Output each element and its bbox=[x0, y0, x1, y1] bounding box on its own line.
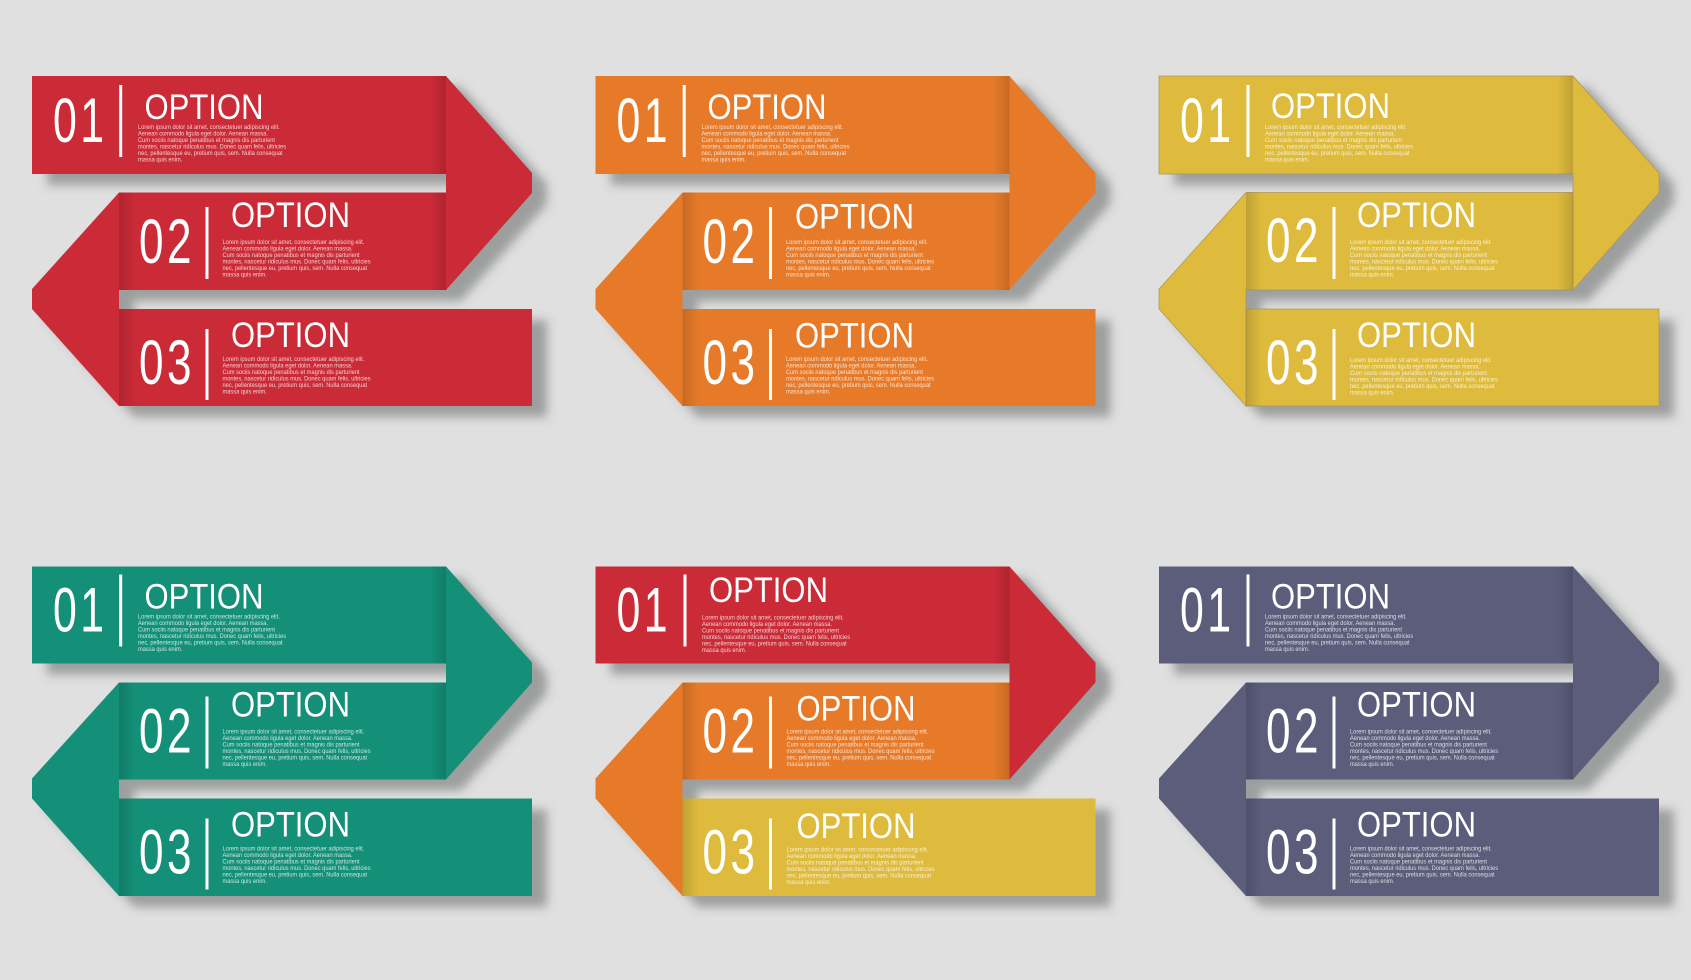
body text: nec, pellentesque eu, pretium quis, sem. Nulla consequat bbox=[138, 151, 283, 157]
number 01: 01 bbox=[53, 575, 107, 646]
band 03 bbox=[702, 807, 935, 890]
number 03: 03 bbox=[139, 817, 195, 887]
divider bbox=[1246, 574, 1250, 646]
divider bbox=[206, 696, 208, 768]
body text: Lorem ipsum dolor sit amet, consectetuer adipiscing elit. bbox=[786, 729, 929, 736]
body text: massa quis enim. bbox=[138, 647, 183, 653]
panel: orange ribbon bbox=[596, 76, 1110, 417]
body text: Aenean commodo ligula eget dolor. Aenean massa. bbox=[786, 363, 916, 370]
body text: nec, pellentesque eu, pretium quis, sem. Nulla consequat bbox=[702, 151, 846, 157]
body text: Cum sociis natoque penatibus et magnis dis parturient bbox=[1350, 742, 1487, 749]
ribbon shadow bbox=[610, 87, 1110, 417]
body text: massa quis enim. bbox=[786, 762, 831, 768]
number 02: 02 bbox=[1266, 696, 1322, 766]
body text: massa quis enim. bbox=[786, 389, 831, 396]
body text: Cum sociis natoque penatibus et magnis dis parturient bbox=[222, 253, 360, 259]
body text: massa quis enim. bbox=[1265, 157, 1310, 164]
body text: Aenean commodo ligula eget dolor. Aenean massa. bbox=[222, 246, 353, 253]
divider bbox=[1246, 85, 1250, 157]
heading: OPTION bbox=[231, 196, 350, 235]
body text: Aenean commodo ligula eget dolor. Aenean massa. bbox=[222, 853, 353, 859]
body text: Lorem ipsum dolor sit amet, consectetuer adipiscing elit. bbox=[786, 240, 928, 246]
body text: massa quis enim. bbox=[786, 272, 831, 279]
heading: OPTION bbox=[231, 806, 350, 844]
body text: Lorem ipsum dolor sit amet, consectetuer adipiscing elit. bbox=[1265, 614, 1407, 621]
body text: Cum sociis natoque penatibus et magnis dis parturient bbox=[786, 370, 923, 376]
body text: nec, pellentesque eu, pretium quis, sem. Nulla consequat bbox=[786, 755, 931, 762]
band 02 bbox=[139, 196, 371, 279]
divider bbox=[119, 85, 122, 157]
ribbon shadow bbox=[610, 578, 1110, 907]
band 02 bbox=[1266, 686, 1498, 768]
band 02 bbox=[702, 198, 934, 279]
body text: montes, nascetur ridiculus mus. Donec quam felis, ultricies bbox=[1350, 259, 1498, 266]
body text: nec, pellentesque eu, pretium quis, sem. Nulla consequat bbox=[222, 755, 367, 762]
panel: multicolour ribbon bbox=[596, 566, 1110, 907]
body text: Aenean commodo ligula eget dolor. Aenean massa. bbox=[1350, 364, 1480, 371]
body text: Lorem ipsum dolor sit amet, consectetuer adipiscing elit. bbox=[1350, 240, 1492, 246]
number 03: 03 bbox=[1266, 817, 1322, 887]
body text: Lorem ipsum dolor sit amet, consectetuer adipiscing elit. bbox=[1265, 125, 1407, 131]
body text: Cum sociis natoque penatibus et magnis dis parturient bbox=[786, 860, 924, 867]
heading: OPTION bbox=[1357, 806, 1476, 844]
divider bbox=[769, 329, 772, 400]
band 01 bbox=[616, 85, 850, 164]
divider bbox=[1332, 329, 1336, 400]
number 02: 02 bbox=[139, 206, 195, 277]
body text: nec, pellentesque eu, pretium quis, sem. Nulla consequat bbox=[1350, 384, 1495, 390]
body text: nec, pellentesque eu, pretium quis, sem. Nulla consequat bbox=[1350, 872, 1495, 879]
divider bbox=[769, 696, 772, 768]
body text: massa quis enim. bbox=[222, 762, 267, 768]
number 01: 01 bbox=[1180, 575, 1234, 646]
body text: Lorem ipsum dolor sit amet, consectetuer adipiscing elit. bbox=[1350, 846, 1492, 853]
body text: massa quis enim. bbox=[1350, 762, 1395, 768]
number 03: 03 bbox=[702, 327, 759, 398]
body text: massa quis enim. bbox=[222, 389, 267, 396]
body text: Cum sociis natoque penatibus et magnis dis parturient bbox=[1350, 371, 1487, 377]
ribbon shape bbox=[1159, 566, 1659, 896]
band 02 bbox=[139, 686, 371, 768]
body text: montes, nascetur ridiculus mus. Donec quam felis, ultricies bbox=[222, 376, 371, 383]
body text: Lorem ipsum dolor sit amet, consectetuer adipiscing elit. bbox=[1350, 729, 1492, 736]
divider bbox=[206, 207, 208, 279]
number 02: 02 bbox=[139, 696, 195, 766]
heading: OPTION bbox=[708, 88, 826, 127]
body text: Aenean commodo ligula eget dolor. Aenean massa. bbox=[786, 736, 917, 742]
body text: Cum sociis natoque penatibus et magnis dis parturient bbox=[222, 742, 360, 749]
heading: OPTION bbox=[1357, 686, 1476, 724]
number 02: 02 bbox=[702, 696, 759, 766]
heading: OPTION bbox=[1357, 196, 1476, 235]
panel: green ribbon bbox=[32, 566, 547, 907]
body text: nec, pellentesque eu, pretium quis, sem. Nulla consequat bbox=[1350, 755, 1495, 762]
heading: OPTION bbox=[796, 690, 916, 728]
number 03: 03 bbox=[1266, 327, 1322, 398]
body text: nec, pellentesque eu, pretium quis, sem. Nulla consequat bbox=[786, 266, 931, 272]
band 02 bbox=[702, 690, 935, 768]
heading: OPTION bbox=[231, 316, 350, 355]
body text: montes, nascetur ridiculus mus. Donec quam felis, ultricies bbox=[786, 749, 935, 755]
body text: montes, nascetur ridiculus mus. Donec quam felis, ultricies bbox=[1265, 144, 1413, 151]
band 01 bbox=[1180, 85, 1413, 164]
body text: Cum sociis natoque penatibus et magnis dis parturient bbox=[702, 628, 839, 635]
body text: Lorem ipsum dolor sit amet, consectetuer adipiscing elit. bbox=[702, 125, 844, 131]
heading: OPTION bbox=[144, 578, 264, 616]
body text: nec, pellentesque eu, pretium quis, sem. Nulla consequat bbox=[1265, 151, 1410, 157]
body text: Cum sociis natoque penatibus et magnis dis parturient bbox=[1350, 859, 1487, 866]
body text: montes, nascetur ridiculus mus. Donec quam felis, ultricies bbox=[1350, 866, 1498, 872]
body text: Cum sociis natoque penatibus et magnis dis parturient bbox=[702, 138, 839, 144]
body text: Aenean commodo ligula eget dolor. Aenean massa. bbox=[702, 131, 832, 138]
number 03: 03 bbox=[139, 327, 195, 398]
body text: massa quis enim. bbox=[138, 157, 183, 164]
band 01 bbox=[616, 571, 850, 654]
ribbon shadow bbox=[1174, 578, 1674, 907]
number 01: 01 bbox=[616, 86, 671, 156]
ribbon shape bbox=[1159, 76, 1659, 406]
body text: Lorem ipsum dolor sit amet, consectetuer adipiscing elit. bbox=[1350, 358, 1492, 364]
body text: montes, nascetur ridiculus mus. Donec quam felis, ultricies bbox=[138, 634, 286, 640]
body text: nec, pellentesque eu, pretium quis, sem. Nulla consequat bbox=[138, 640, 283, 647]
band 01 bbox=[53, 574, 286, 653]
body text: Cum sociis natoque penatibus et magnis dis parturient bbox=[786, 253, 923, 259]
body text: montes, nascetur ridiculus mus. Donec quam felis, ultricies bbox=[1265, 634, 1413, 640]
band 03 bbox=[139, 316, 371, 400]
ribbon shadow bbox=[47, 578, 547, 907]
body text: Lorem ipsum dolor sit amet, consectetuer adipiscing elit. bbox=[222, 729, 365, 736]
body text: Cum sociis natoque penatibus et magnis dis parturient bbox=[1265, 627, 1402, 634]
body text: Aenean commodo ligula eget dolor. Aenean massa. bbox=[138, 621, 268, 627]
body text: Cum sociis natoque penatibus et magnis dis parturient bbox=[222, 859, 360, 866]
body text: Lorem ipsum dolor sit amet, consectetuer adipiscing elit. bbox=[138, 614, 280, 621]
body text: montes, nascetur ridiculus mus. Donec quam felis, ultricies bbox=[1350, 749, 1498, 755]
body text: nec, pellentesque eu, pretium quis, sem. Nulla consequat bbox=[786, 873, 931, 880]
number 01: 01 bbox=[53, 86, 107, 156]
body text: montes, nascetur ridiculus mus. Donec quam felis, ultricies bbox=[222, 259, 371, 266]
body text: Lorem ipsum dolor sit amet, consectetuer adipiscing elit. bbox=[786, 357, 928, 363]
heading: OPTION bbox=[796, 807, 916, 846]
body text: Cum sociis natoque penatibus et magnis dis parturient bbox=[786, 742, 924, 749]
heading: OPTION bbox=[1357, 316, 1476, 355]
divider bbox=[769, 207, 772, 279]
body text: Aenean commodo ligula eget dolor. Aenean massa. bbox=[138, 131, 268, 138]
body text: montes, nascetur ridiculus mus. Donec quam felis, ultricies bbox=[786, 259, 934, 266]
divider bbox=[119, 574, 122, 646]
body text: Cum sociis natoque penatibus et magnis dis parturient bbox=[138, 627, 275, 634]
body text: montes, nascetur ridiculus mus. Donec quam felis, ultricies bbox=[1350, 377, 1498, 384]
body text: massa quis enim. bbox=[1350, 879, 1395, 885]
body text: Aenean commodo ligula eget dolor. Aenean massa. bbox=[1350, 853, 1480, 859]
number 02: 02 bbox=[702, 206, 759, 277]
body text: nec, pellentesque eu, pretium quis, sem. Nulla consequat bbox=[1350, 266, 1495, 272]
body text: montes, nascetur ridiculus mus. Donec quam felis, ultricies bbox=[222, 866, 371, 872]
divider bbox=[684, 574, 686, 646]
body text: Cum sociis natoque penatibus et magnis dis parturient bbox=[138, 138, 275, 144]
body text: montes, nascetur ridiculus mus. Donec quam felis, ultricies bbox=[138, 144, 286, 151]
panel: slate ribbon bbox=[1159, 566, 1674, 907]
body text: Lorem ipsum dolor sit amet, consectetuer adipiscing elit. bbox=[222, 357, 365, 363]
body text: massa quis enim. bbox=[222, 272, 267, 279]
body text: massa quis enim. bbox=[702, 157, 746, 164]
heading: OPTION bbox=[795, 198, 914, 236]
body text: montes, nascetur ridiculus mus. Donec quam felis, ultricies bbox=[786, 867, 935, 873]
body text: nec, pellentesque eu, pretium quis, sem. Nulla consequat bbox=[786, 383, 931, 389]
body text: montes, nascetur ridiculus mus. Donec quam felis, ultricies bbox=[702, 144, 850, 151]
band 03 bbox=[139, 806, 371, 890]
body text: nec, pellentesque eu, pretium quis, sem. Nulla consequat bbox=[222, 383, 367, 389]
panel: yellow ribbon bbox=[1159, 76, 1674, 417]
body text: montes, nascetur ridiculus mus. Donec quam felis, ultricies bbox=[786, 376, 934, 383]
body text: Lorem ipsum dolor sit amet, consectetuer adipiscing elit. bbox=[222, 846, 365, 853]
body text: Cum sociis natoque penatibus et magnis dis parturient bbox=[1350, 253, 1487, 259]
divider bbox=[206, 818, 208, 890]
divider bbox=[683, 85, 686, 157]
body text: Aenean commodo ligula eget dolor. Aenean massa. bbox=[1265, 131, 1395, 138]
body text: Aenean commodo ligula eget dolor. Aenean massa. bbox=[1350, 246, 1480, 253]
band 02 bbox=[1266, 196, 1498, 279]
heading: OPTION bbox=[144, 88, 264, 127]
body text: massa quis enim. bbox=[702, 648, 747, 654]
body text: Cum sociis natoque penatibus et magnis dis parturient bbox=[222, 370, 360, 376]
body text: Aenean commodo ligula eget dolor. Aenean massa. bbox=[222, 363, 353, 370]
divider bbox=[769, 818, 772, 890]
ribbon shape bbox=[596, 566, 1096, 896]
divider bbox=[206, 329, 208, 400]
band 03 bbox=[1266, 806, 1498, 890]
band 03 bbox=[1266, 316, 1498, 400]
body text: Aenean commodo ligula eget dolor. Aenean massa. bbox=[786, 246, 916, 253]
body text: Lorem ipsum dolor sit amet, consectetuer adipiscing elit. bbox=[138, 125, 280, 131]
ribbon shadow bbox=[47, 87, 547, 417]
body text: Aenean commodo ligula eget dolor. Aenean massa. bbox=[1265, 621, 1395, 627]
body text: Aenean commodo ligula eget dolor. Aenean massa. bbox=[222, 736, 353, 742]
ribbon shape bbox=[32, 76, 532, 406]
body text: nec, pellentesque eu, pretium quis, sem. Nulla consequat bbox=[222, 266, 367, 272]
number 02: 02 bbox=[1266, 205, 1322, 276]
body text: massa quis enim. bbox=[786, 880, 831, 886]
heading: OPTION bbox=[231, 686, 350, 724]
ribbon shape bbox=[32, 566, 532, 896]
body text: massa quis enim. bbox=[1350, 272, 1395, 279]
number 03: 03 bbox=[702, 817, 759, 887]
divider bbox=[1332, 207, 1336, 279]
body text: massa quis enim. bbox=[222, 879, 267, 885]
body text: Aenean commodo ligula eget dolor. Aenean massa. bbox=[702, 622, 832, 628]
body text: nec, pellentesque eu, pretium quis, sem. Nulla consequat bbox=[1265, 640, 1410, 647]
body text: Lorem ipsum dolor sit amet, consectetuer adipiscing elit. bbox=[222, 240, 365, 246]
heading: OPTION bbox=[709, 571, 828, 610]
band 01 bbox=[1180, 574, 1413, 653]
body text: Cum sociis natoque penatibus et magnis dis parturient bbox=[1265, 138, 1402, 144]
body text: montes, nascetur ridiculus mus. Donec quam felis, ultricies bbox=[702, 635, 850, 641]
heading: OPTION bbox=[795, 316, 914, 356]
number 01: 01 bbox=[1180, 86, 1234, 156]
body text: massa quis enim. bbox=[1350, 390, 1395, 397]
number 01: 01 bbox=[616, 575, 671, 646]
band 03 bbox=[702, 316, 934, 400]
body text: Aenean commodo ligula eget dolor. Aenean massa. bbox=[1350, 736, 1480, 742]
body text: nec, pellentesque eu, pretium quis, sem. Nulla consequat bbox=[702, 641, 847, 648]
heading: OPTION bbox=[1271, 87, 1390, 126]
panel: red ribbon bbox=[32, 76, 547, 417]
body text: Lorem ipsum dolor sit amet, consectetuer adipiscing elit. bbox=[786, 847, 929, 854]
heading: OPTION bbox=[1271, 578, 1390, 616]
ribbon shape bbox=[596, 76, 1096, 406]
band 01 bbox=[53, 85, 286, 164]
body text: montes, nascetur ridiculus mus. Donec quam felis, ultricies bbox=[222, 749, 371, 755]
body text: massa quis enim. bbox=[1265, 647, 1310, 653]
divider bbox=[1332, 818, 1336, 890]
body text: nec, pellentesque eu, pretium quis, sem. Nulla consequat bbox=[222, 872, 367, 879]
body text: Lorem ipsum dolor sit amet, consectetuer adipiscing elit. bbox=[702, 615, 844, 622]
ribbon shadow bbox=[1174, 87, 1674, 417]
body text: Aenean commodo ligula eget dolor. Aenean massa. bbox=[786, 854, 917, 860]
divider bbox=[1332, 696, 1336, 768]
